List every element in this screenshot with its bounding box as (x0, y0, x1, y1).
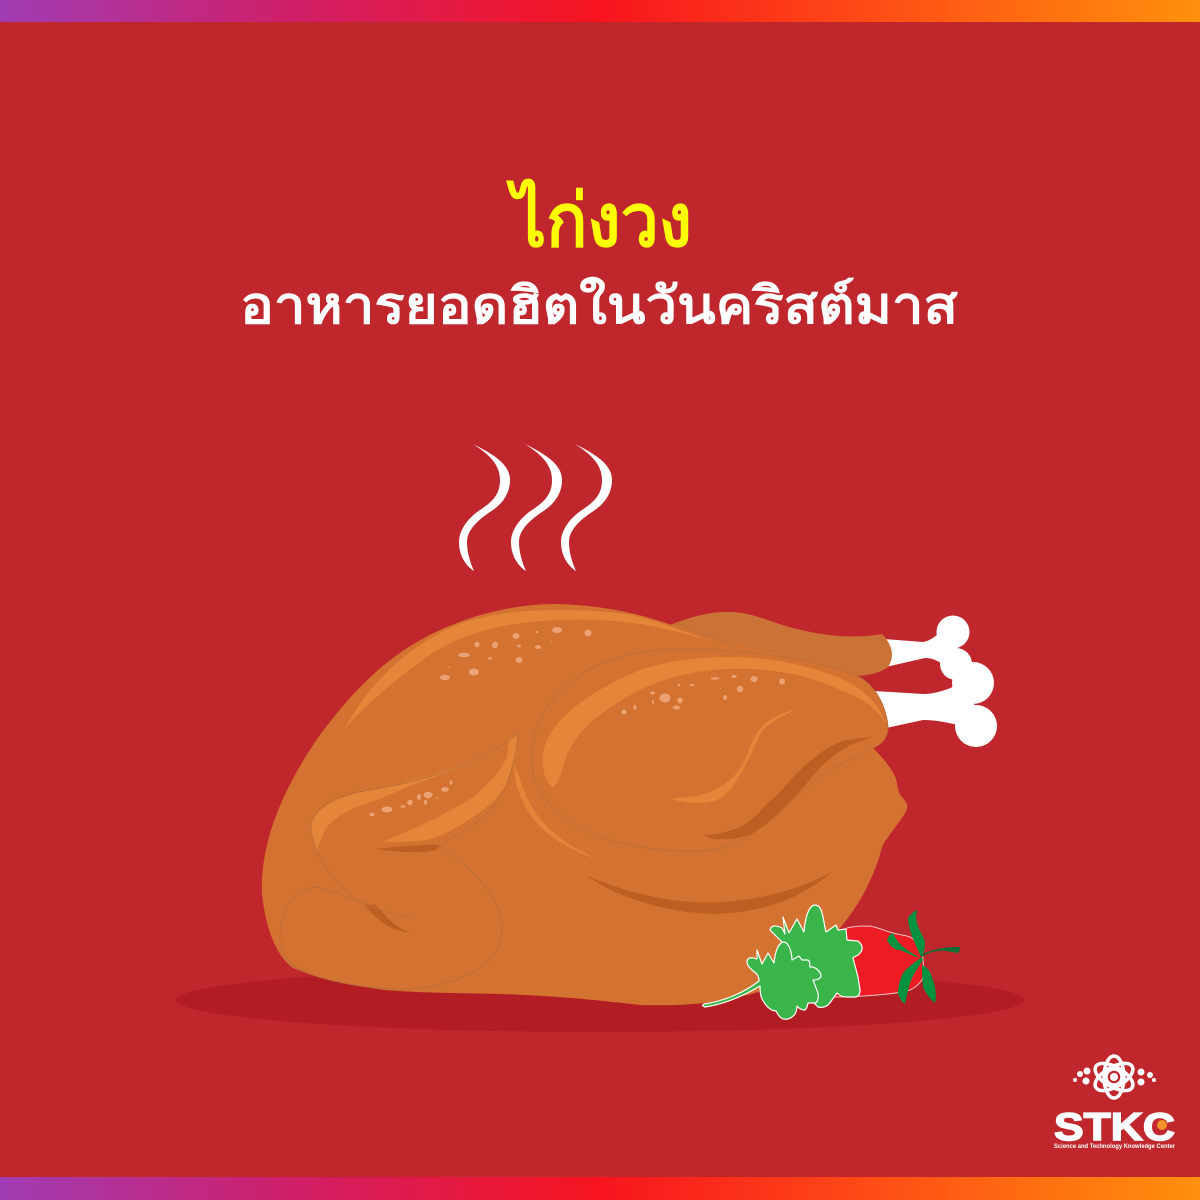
rear leg (670, 612, 892, 676)
logo tagline: Science and Technology Knowledge Center (1054, 1144, 1176, 1150)
turkey body (262, 604, 907, 1005)
icon: tomato stem (887, 910, 960, 1004)
logo wordmark: STKC (1054, 1106, 1175, 1149)
STKC logo (1054, 1056, 1176, 1150)
tomato (815, 910, 960, 1004)
freckles: leg (369, 780, 452, 816)
icon: rear drumstick bone (884, 616, 972, 680)
main wing highlight (543, 657, 886, 788)
parsley (703, 905, 862, 1019)
chest curve shadow (586, 872, 832, 914)
main wing outline (532, 649, 888, 851)
lower crease shadow (364, 904, 410, 932)
leg crease shadow (374, 845, 439, 852)
icon: front drumstick bone (874, 662, 997, 747)
back parsley leaf (770, 905, 862, 1007)
plate shadow (176, 968, 1024, 1032)
freckles: wing (622, 675, 785, 714)
icon: emblem dots (1073, 1068, 1156, 1086)
turkey illustration (262, 604, 997, 1005)
subtitle: อาหารยอดฮิตในวันคริสต์มาส (240, 276, 959, 334)
bottom gradient bar (0, 1177, 1200, 1200)
icon: logo orange dot (1157, 1120, 1167, 1130)
front parsley leaf with stem (703, 942, 821, 1019)
leg lower highlight (382, 733, 518, 842)
top gradient bar (0, 0, 1200, 22)
top breast highlight (344, 610, 707, 730)
back contour line (677, 623, 737, 649)
title: ไก่งวง (506, 177, 692, 262)
freckles: breast (440, 627, 592, 680)
icon: steam (459, 444, 612, 571)
leg upper highlight (311, 751, 495, 853)
thigh and wing contour lines (280, 733, 518, 989)
icon: atom emblem (1091, 1056, 1137, 1098)
inner thigh highlight (514, 765, 600, 860)
wing feather highlight (670, 710, 795, 803)
wing underside shadow (703, 737, 873, 839)
